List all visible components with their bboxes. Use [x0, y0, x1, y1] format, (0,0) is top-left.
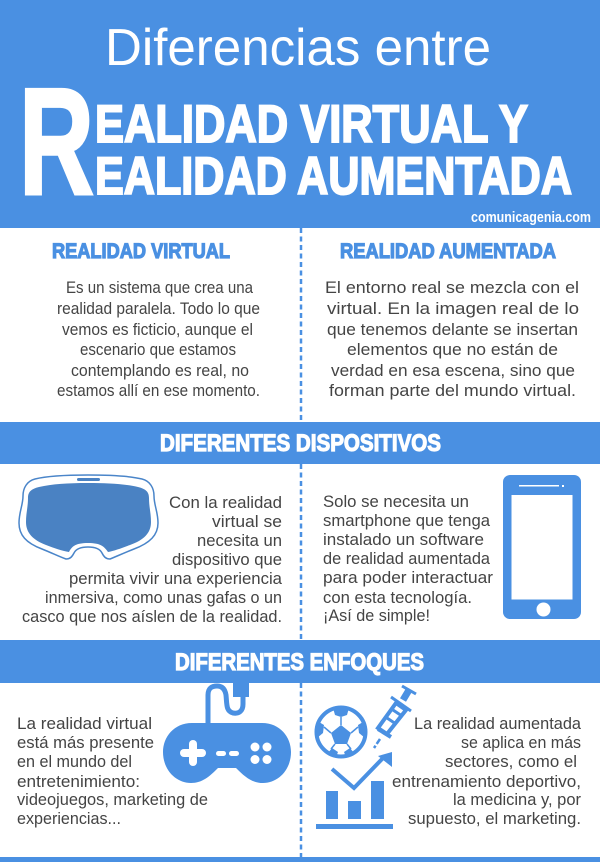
text: AR focus: entrenamiento deportivo, [392, 772, 581, 791]
text: AR device: instalado un software [323, 530, 484, 549]
text: VR focus: experiencias... [17, 809, 121, 828]
text: AR device: ¡Así de simple! [323, 606, 430, 625]
text: AR device: con esta tecnología. [323, 588, 472, 607]
icon: growth chart [316, 752, 393, 829]
text: VR device: virtual se [212, 512, 282, 531]
text: VR device [22, 493, 283, 626]
text: AR focus: La realidad aumentada [414, 714, 582, 733]
text: AR focus: supuesto, el marketing. [408, 809, 581, 828]
text: VR device: Con la realidad [169, 493, 282, 512]
text: VR focus: en el mundo del [17, 752, 132, 771]
section band: diferentes dispositivos: DIFERENTES DISPOSITIVOS [160, 430, 441, 457]
text: VR device: necesita un [197, 531, 282, 550]
text: VR focus [17, 714, 208, 828]
text: AR focus: sectores, como el [445, 752, 577, 771]
panel: realidad virtual definition [52, 240, 260, 400]
text: VR device: inmersiva, como unas gafas o un [45, 588, 282, 607]
text: AR device: para poder interactuar [323, 568, 493, 587]
text: AR device: de realidad aumentada [323, 549, 491, 568]
title: Diferencias entre: Diferencias entre [105, 19, 491, 77]
text: realidad aumentada definition: elementos que no están de [347, 340, 558, 359]
text: VR focus: La realidad virtual [17, 714, 152, 733]
section band: diferentes enfoques [0, 640, 600, 683]
text: AR device: Solo se necesita un [323, 492, 469, 511]
title: big initial R: R [19, 57, 94, 227]
text: AR device [323, 492, 493, 625]
text: realidad virtual definition: escenario que estamos [80, 340, 236, 359]
heading: realidad aumentada: REALIDAD AUMENTADA [340, 240, 556, 263]
panel: realidad aumentada definition [325, 240, 579, 400]
icon: VR headset [19, 475, 158, 559]
text: AR focus [392, 714, 582, 828]
heading: realidad virtual: REALIDAD VIRTUAL [52, 240, 230, 263]
text: VR device: permita vivir una experiencia [69, 569, 283, 588]
text: realidad virtual definition: contemplando es real, no [71, 361, 249, 380]
icon: football [316, 708, 366, 757]
text: AR focus: la medicina y, por [453, 790, 581, 809]
text: realidad aumentada definition: virtual. En la imagen real de lo [327, 299, 579, 318]
text: realidad virtual definition: vemos es ficticio, aunque el [62, 320, 253, 339]
header banner [0, 0, 600, 228]
icon: syringe [374, 686, 416, 748]
text: VR focus: videojuegos, marketing de [17, 790, 208, 809]
text: realidad aumentada definition: El entorno real se mezcla con el [325, 278, 579, 297]
text: AR focus: se aplica en más [461, 733, 581, 752]
section band: diferentes dispositivos [0, 422, 600, 464]
icon: game controller [163, 680, 291, 783]
text: realidad virtual definition: realidad paralela. Todo lo que [57, 299, 260, 318]
text: VR focus: entretenimiento: [17, 772, 140, 791]
text: realidad virtual definition: Es un sistema que crea una [66, 278, 253, 297]
text: AR device: smartphone que tenga [323, 511, 491, 530]
section band: diferentes enfoques: DIFERENTES ENFOQUES [175, 649, 424, 676]
text: realidad aumentada definition [325, 278, 579, 400]
text: realidad virtual definition: estamos allí en ese momento. [57, 381, 260, 400]
text: VR device: dispositivo que [172, 550, 282, 569]
icon: smartphone [503, 475, 581, 619]
text: realidad virtual definition [57, 278, 260, 400]
text: realidad aumentada definition: que tenemos delante se insertan [327, 320, 578, 339]
text: VR device: casco que nos aíslen de la realidad. [22, 607, 282, 626]
text: realidad aumentada definition: forman parte del mundo virtual. [329, 381, 576, 400]
text: realidad aumentada definition: verdad en esa escena, sino que [331, 361, 575, 380]
text: VR focus: está más presente [17, 733, 154, 752]
